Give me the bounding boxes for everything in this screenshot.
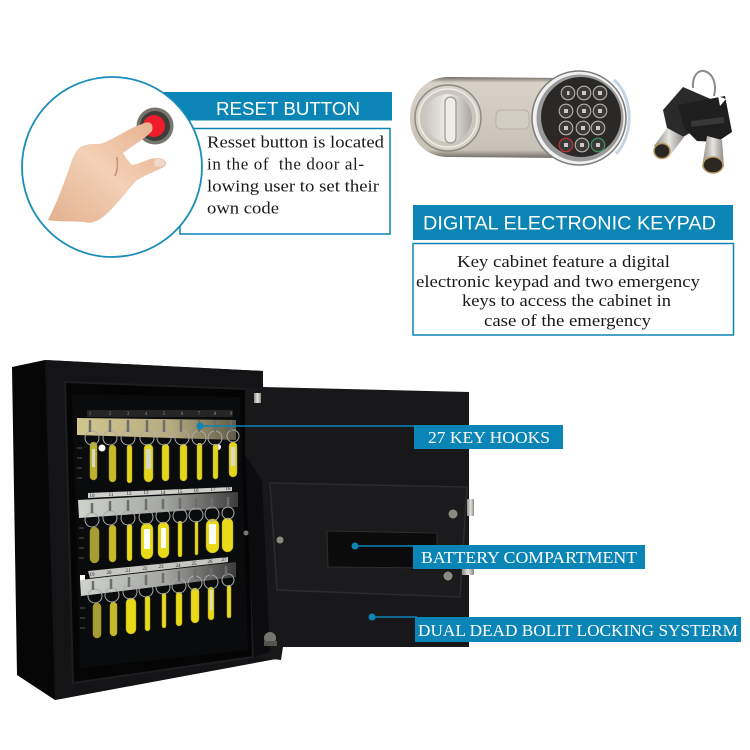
row 2 hook numbers: 16 (194, 489, 199, 494)
keypad heading: DIGITAL ELECTRONIC KEYPAD (423, 212, 716, 234)
keypad description text: Key cabinet feature a digital (457, 252, 670, 271)
door lock housing (270, 483, 467, 597)
row 2 hook numbers: 11 (109, 493, 114, 498)
icon: red reset button (136, 108, 174, 144)
keypad description text: electronic keypad and two emergency (416, 272, 701, 291)
reset button heading (160, 92, 392, 120)
row 2 hook numbers: 10 (90, 494, 95, 499)
reset button description text: lowing user to set their (207, 176, 379, 196)
row 2 hook numbers: 14 (160, 491, 166, 496)
reset button heading: RESET BUTTON (216, 99, 360, 119)
keypad heading (413, 205, 733, 240)
row 1 hook numbers: 6 (181, 412, 184, 417)
row 1 hook numbers: 2 (109, 412, 112, 417)
keypad description box (413, 244, 734, 335)
cabinet interior (65, 382, 253, 683)
callout: dual dead bolt locking system: DUAL DEAD BOLIT LOCKING SYSTERM (418, 621, 738, 640)
battery cover (327, 531, 437, 568)
reset button description text: in the of the door al- (207, 154, 364, 174)
callout: 27 key hooks: 27 KEY HOOKS (428, 428, 550, 447)
row 3 hook numbers: 26 (208, 560, 213, 565)
row 1 hook numbers: 4 (145, 412, 148, 417)
keypad description text: case of the emergency (484, 311, 652, 330)
row 1 hook numbers: 1 (89, 412, 92, 417)
row 1 hook numbers: 5 (163, 412, 166, 417)
row 3 key hooks (80, 557, 236, 638)
keypad buttons (559, 86, 607, 152)
row 2 hook numbers: 12 (126, 492, 132, 497)
callout: battery compartment: BATTERY COMPARTMENT (421, 548, 638, 567)
open door (244, 387, 474, 660)
callout: dual dead bolt locking system (368, 614, 741, 642)
row 1 hook numbers: 3 (127, 412, 130, 417)
row 3 hook numbers (90, 558, 227, 578)
panel: digital electronic keypad (410, 71, 734, 335)
row 2 hook numbers (90, 487, 231, 499)
reset button description text: own code (207, 198, 279, 218)
keypad lock photo (410, 71, 629, 165)
row 3 hook numbers: 27 (222, 558, 227, 563)
reset button description box (180, 128, 390, 234)
emergency keys photo (654, 71, 732, 173)
reset button description text: Resset button is located (207, 132, 385, 152)
row 1 hook numbers: 8 (214, 412, 217, 417)
row 3 hook numbers: 21 (126, 569, 131, 574)
circle frame (22, 77, 202, 257)
keypad dial (532, 71, 626, 165)
row 2 hook numbers: 17 (210, 488, 216, 493)
cabinet body (12, 360, 281, 700)
row 1 hook numbers: 9 (230, 412, 233, 417)
callout: battery compartment (352, 542, 645, 569)
row 3 hook numbers: 19 (90, 573, 95, 578)
row 1 hook numbers: 7 (198, 412, 201, 417)
icon: hand pressing button (48, 122, 166, 223)
row 1 hook numbers (89, 412, 233, 417)
row 3 hook numbers: 24 (176, 564, 181, 569)
callout: 27 key hooks (196, 422, 563, 449)
row 3 hook numbers: 22 (142, 567, 148, 572)
keypad description text: keys to access the cabinet in (462, 291, 672, 310)
row 2 key hooks (78, 487, 238, 563)
row 3 hook numbers: 25 (192, 562, 197, 567)
lock thumb knob (415, 85, 481, 151)
row 3 hook numbers: 20 (106, 571, 112, 576)
interior slots (77, 447, 85, 629)
panel: reset button (22, 77, 392, 257)
row 2 hook numbers: 13 (144, 491, 149, 496)
row 2 hook numbers: 15 (178, 490, 183, 495)
row 1 key hooks (77, 410, 239, 483)
door screws and bolts (244, 393, 474, 646)
cabinet photo (12, 360, 474, 700)
row 3 hook numbers: 23 (158, 565, 164, 570)
row 2 hook numbers: 18 (226, 487, 231, 492)
reset button description text (207, 132, 385, 218)
keypad description text (416, 252, 701, 330)
